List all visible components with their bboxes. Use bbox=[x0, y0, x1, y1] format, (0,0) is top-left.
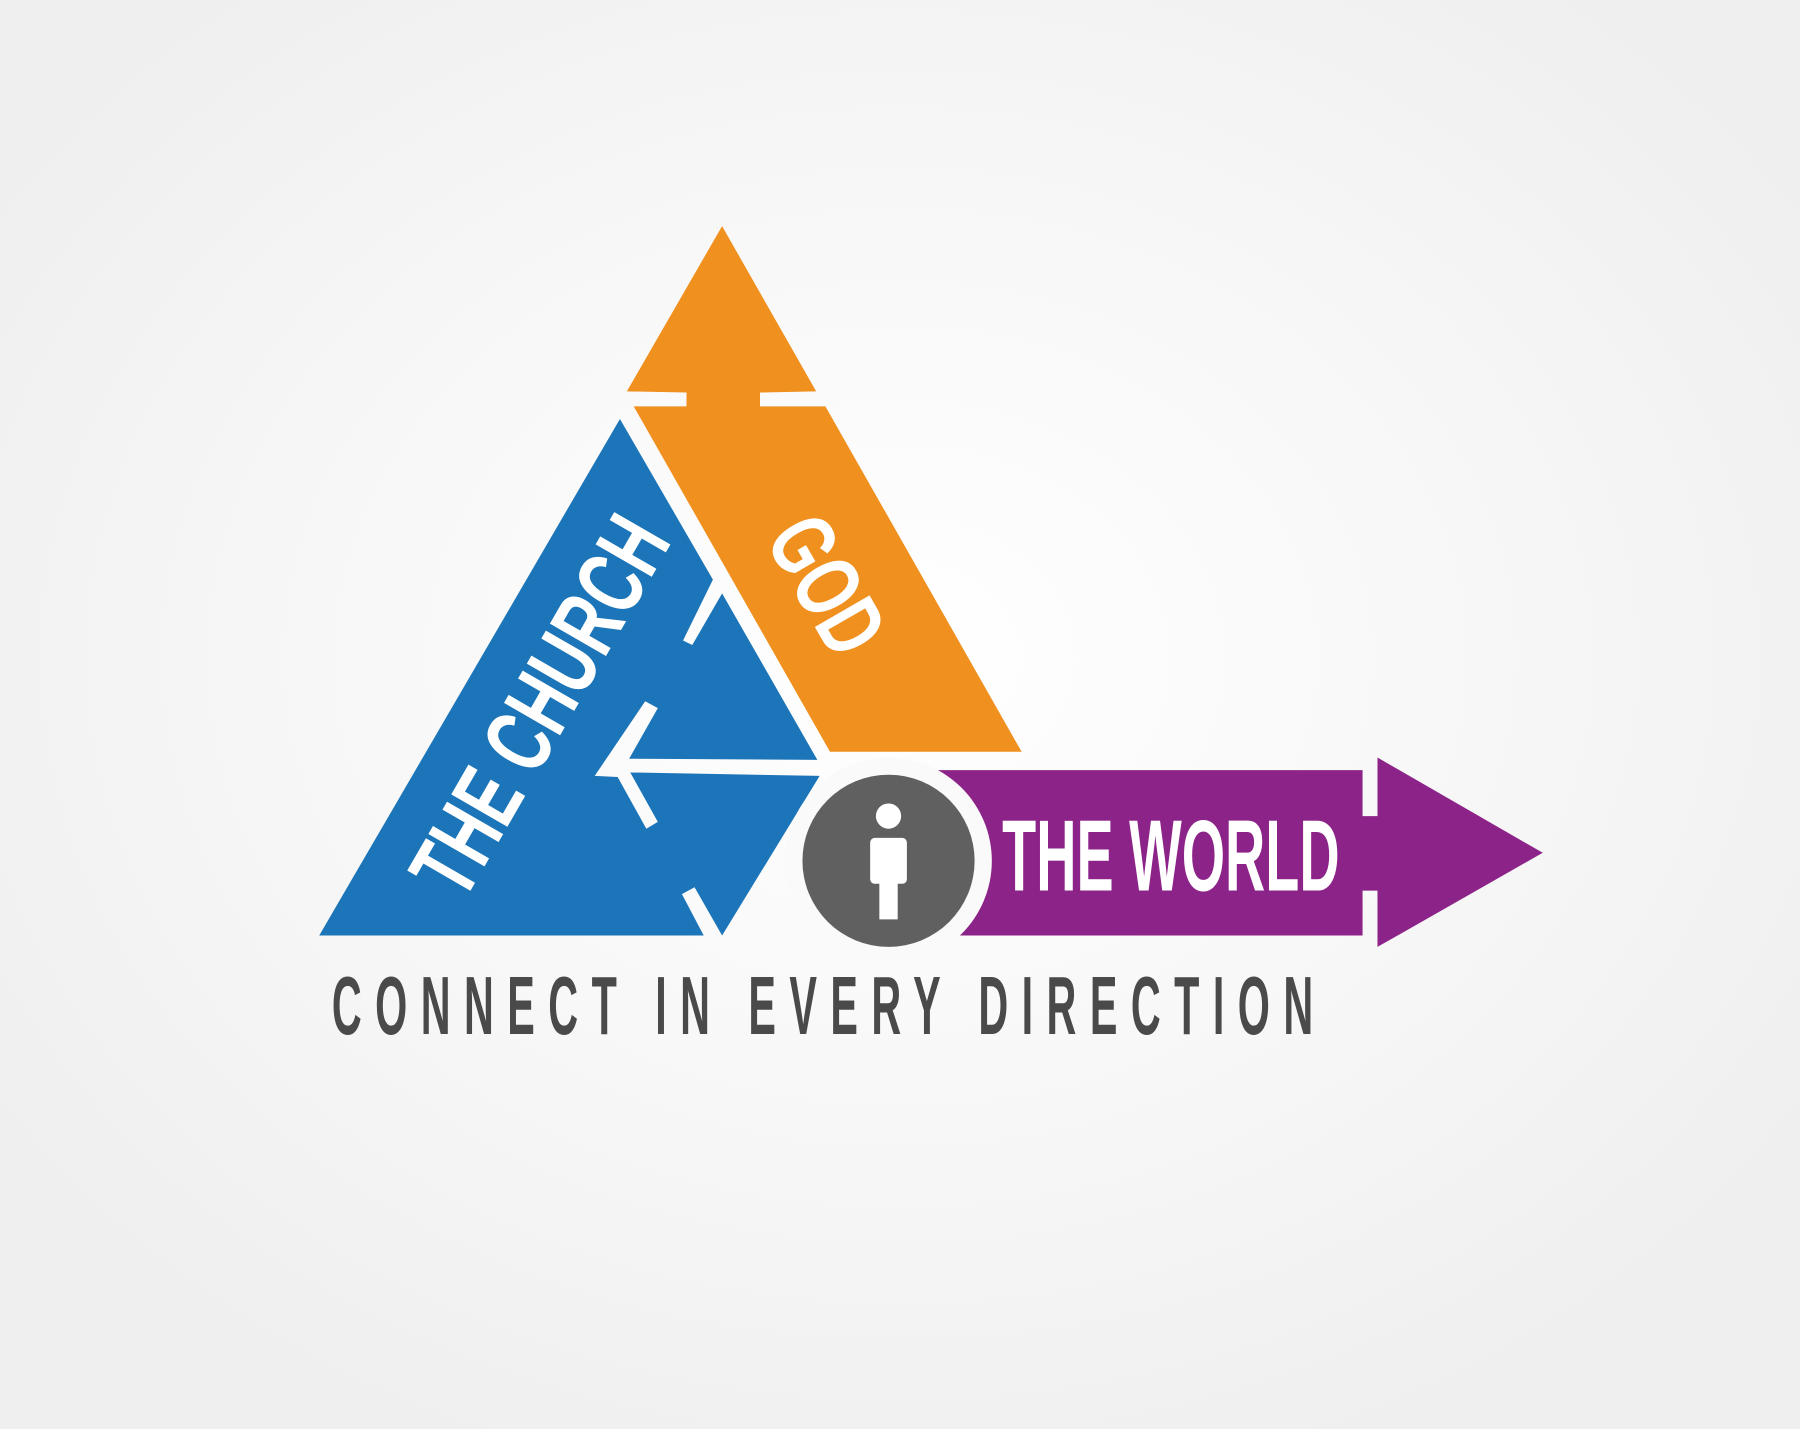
panel: the church (blue triangle) bbox=[319, 419, 820, 935]
label: god: GOD bbox=[747, 498, 906, 673]
tagline: CONNECT IN EVERY DIRECTION bbox=[332, 960, 1313, 1052]
panel: the world (purple arrow) bbox=[918, 758, 1543, 947]
label: the world: THE WORLD bbox=[1002, 801, 1340, 913]
label: the church: THE CHURCH bbox=[389, 498, 690, 914]
icon: person in circle bbox=[785, 758, 992, 964]
panel: god (orange arrow) bbox=[627, 226, 1022, 752]
